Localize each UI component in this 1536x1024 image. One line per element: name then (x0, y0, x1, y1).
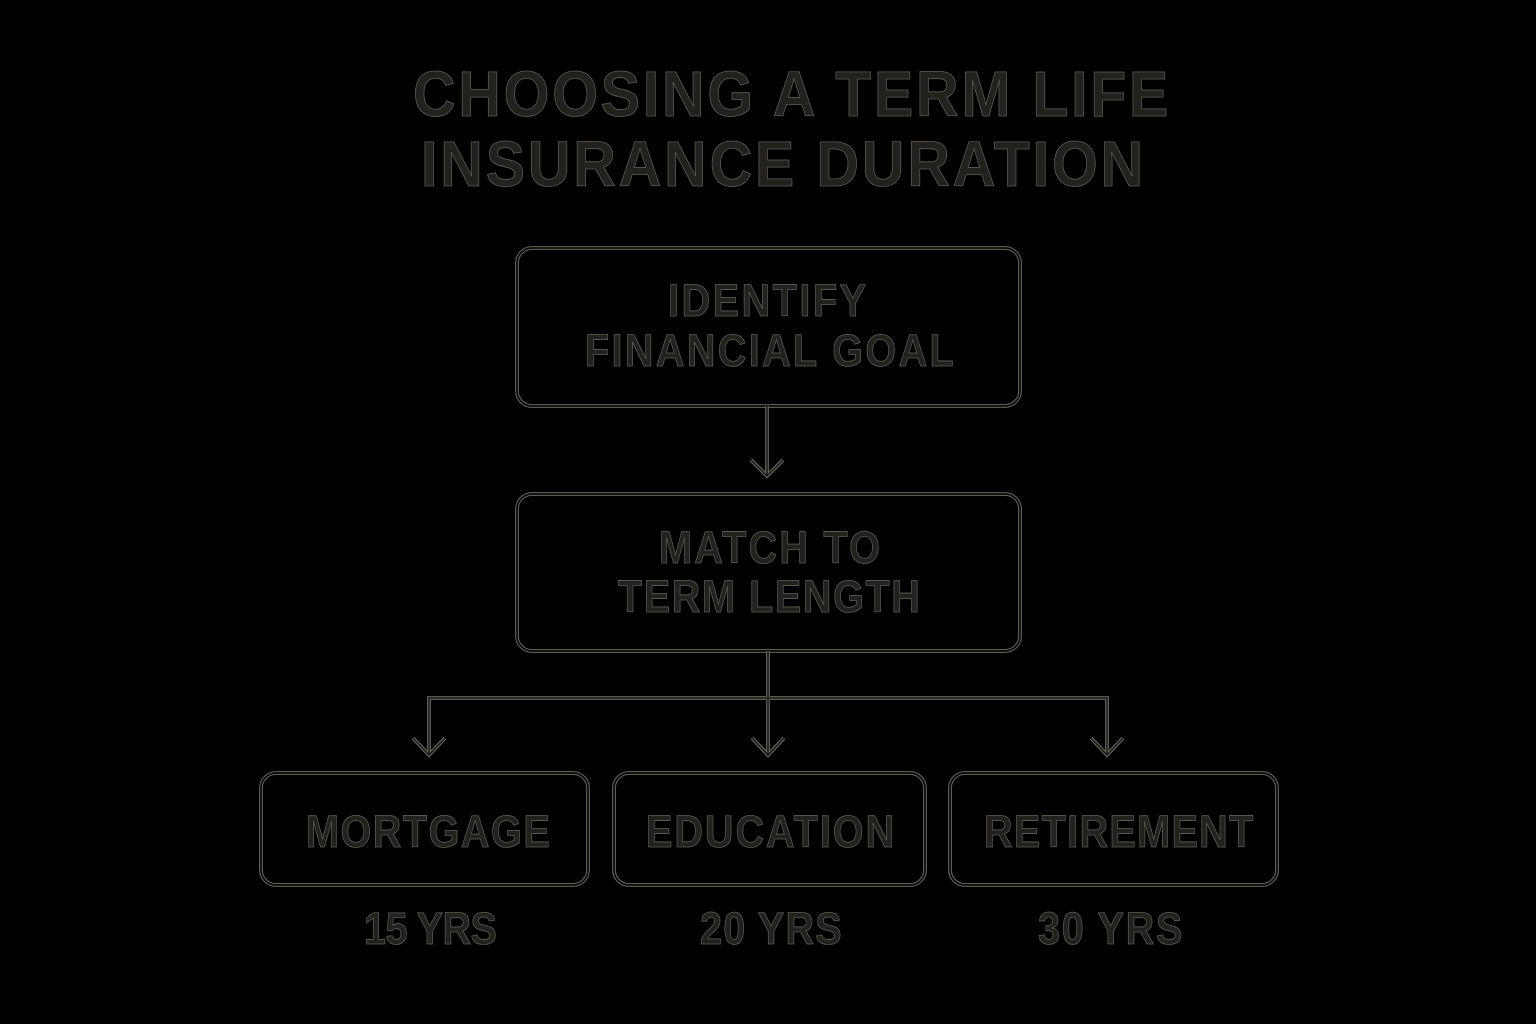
box: education (614, 773, 925, 885)
title (413, 59, 1168, 201)
box: identify financial goal: IDENTIFY (668, 276, 866, 326)
box: retirement: RETIREMENT (984, 807, 1253, 857)
box: identify financial goal (517, 248, 1020, 406)
box: match to term length: TERM LENGTH (618, 572, 920, 622)
box: mortgage (261, 773, 588, 885)
arrows: branching to three goals (413, 651, 1123, 755)
label: 20 years: 20 YRS (700, 904, 842, 954)
box: match to term length (517, 494, 1020, 651)
box: identify financial goal: FINANCIAL GOAL (585, 326, 954, 376)
box: retirement (950, 773, 1277, 885)
arrow: goal to term length (751, 406, 783, 476)
box: match to term length: MATCH TO (659, 523, 880, 573)
title: INSURANCE DURATION (421, 129, 1143, 201)
box: mortgage: MORTGAGE (306, 807, 550, 857)
box: education: EDUCATION (646, 807, 894, 857)
label: 30 years: 30 YRS (1038, 904, 1182, 954)
title: CHOOSING A TERM LIFE (413, 59, 1168, 131)
label: 15 years: 15 YRS (364, 904, 497, 954)
